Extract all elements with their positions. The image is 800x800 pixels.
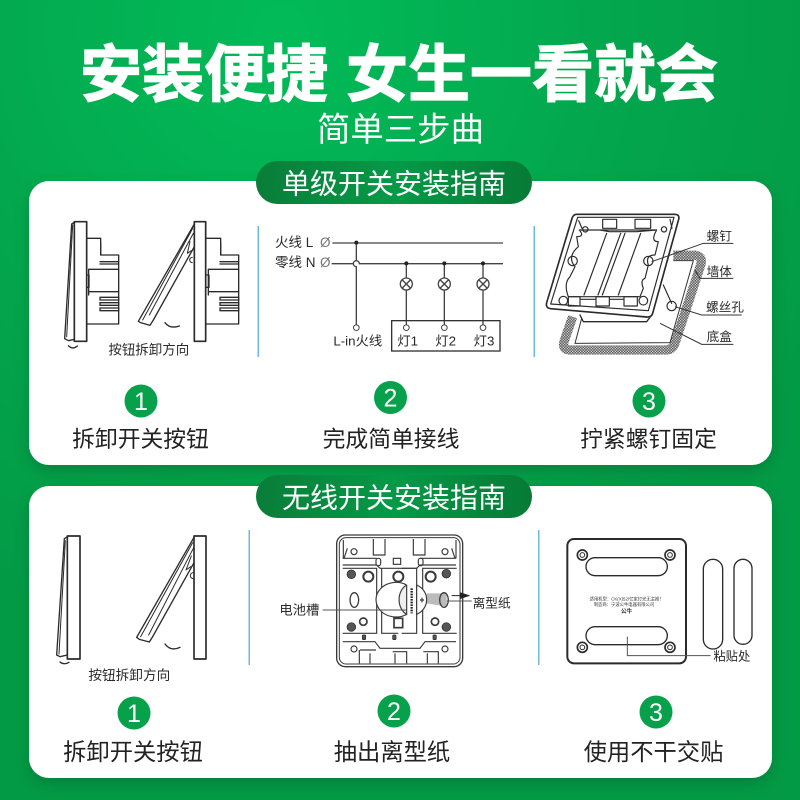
icon: battery slot and release paper: 离型纸 — [473, 595, 511, 610]
step 3 badge: 3 — [649, 699, 663, 727]
heading pill: single-level — [256, 161, 532, 204]
chart: wiring diagram: L-in火线 — [333, 334, 382, 349]
step 1 badge — [118, 696, 150, 730]
chart: wiring diagram: Ø — [320, 235, 331, 250]
card background — [29, 486, 772, 778]
chart: wiring diagram: 灯2 — [435, 334, 456, 349]
step 2 badge: 2 — [387, 698, 401, 726]
icon: battery slot and release paper: 电池槽 — [279, 603, 319, 618]
step 1 badge — [124, 384, 158, 418]
icon: mounting box with screws: 底盒 — [707, 329, 732, 344]
icon: adhesive strips on switch back: 公牛 — [621, 607, 633, 615]
step 3 badge — [632, 384, 666, 418]
panel: wireless switch guide — [29, 475, 772, 778]
step 3 label: 使用不干交贴 — [584, 739, 723, 765]
step 3 badge — [640, 696, 672, 728]
title: 安装便捷 — [80, 41, 328, 110]
divider — [534, 226, 535, 357]
title — [80, 41, 718, 110]
chart: wiring diagram: 火线 L — [275, 235, 314, 250]
icon: battery slot and release paper — [279, 535, 511, 667]
step 1 label: 拆卸开关按钮 — [72, 426, 209, 452]
card background — [29, 181, 772, 465]
divider — [248, 530, 250, 665]
step 2 label: 完成简单接线 — [323, 426, 459, 452]
chart: wiring diagram: 零线 N — [275, 255, 316, 270]
step 1 badge: 1 — [127, 700, 141, 728]
step 2 badge: 2 — [384, 384, 397, 412]
icon: adhesive strips on switch back: 适用机型：CK(X)52/亿家灯光无主推！ — [590, 596, 664, 603]
step 1 badge: 1 — [134, 388, 148, 416]
subtitle: 简单三步曲 — [317, 112, 484, 149]
icon: adhesive strips on switch back: 制造商：宁波公牛电器有限公司 — [594, 601, 654, 608]
step 1 label: 拆卸开关按钮 — [63, 739, 203, 765]
step 3 badge: 3 — [642, 388, 656, 416]
heading pill: single-level: 单级开关安装指南 — [282, 168, 506, 200]
step 2 label: 抽出离型纸 — [334, 739, 450, 765]
heading pill: wireless — [256, 475, 532, 518]
chart: wiring diagram: 灯1 — [397, 334, 418, 349]
icon: mounting box with screws: 墙体 — [707, 265, 732, 279]
arrow: release paper — [452, 593, 469, 598]
title: 女生一看就会 — [346, 41, 718, 110]
icon: mounting box with screws: 螺钉 — [707, 230, 732, 244]
step 3 label: 拧紧螺钉固定 — [580, 426, 717, 452]
caption: button removal direction: 按钮拆卸方向 — [108, 342, 189, 357]
step 2 badge — [374, 381, 407, 414]
icon: mounting box with screws — [546, 214, 744, 350]
icon: switch side views with button removal — [65, 222, 239, 357]
step 2 badge — [378, 694, 410, 728]
chart: wiring diagram: Ø — [320, 255, 331, 270]
icon: mounting box with screws: 螺丝孔 — [706, 301, 744, 315]
panel: single-level switch guide — [29, 161, 772, 465]
icon: adhesive strips on switch back — [567, 539, 752, 663]
divider — [538, 530, 540, 665]
chart: wiring diagram: 灯3 — [474, 334, 494, 349]
icon: adhesive strips on switch back: 粘贴处 — [713, 648, 750, 663]
heading pill: wireless: 无线开关安装指南 — [282, 482, 506, 514]
icon: wireless switch side views — [57, 536, 206, 683]
caption: button removal direction: 按钮拆卸方向 — [88, 668, 170, 683]
divider — [258, 226, 259, 357]
chart: wiring diagram — [275, 235, 503, 351]
